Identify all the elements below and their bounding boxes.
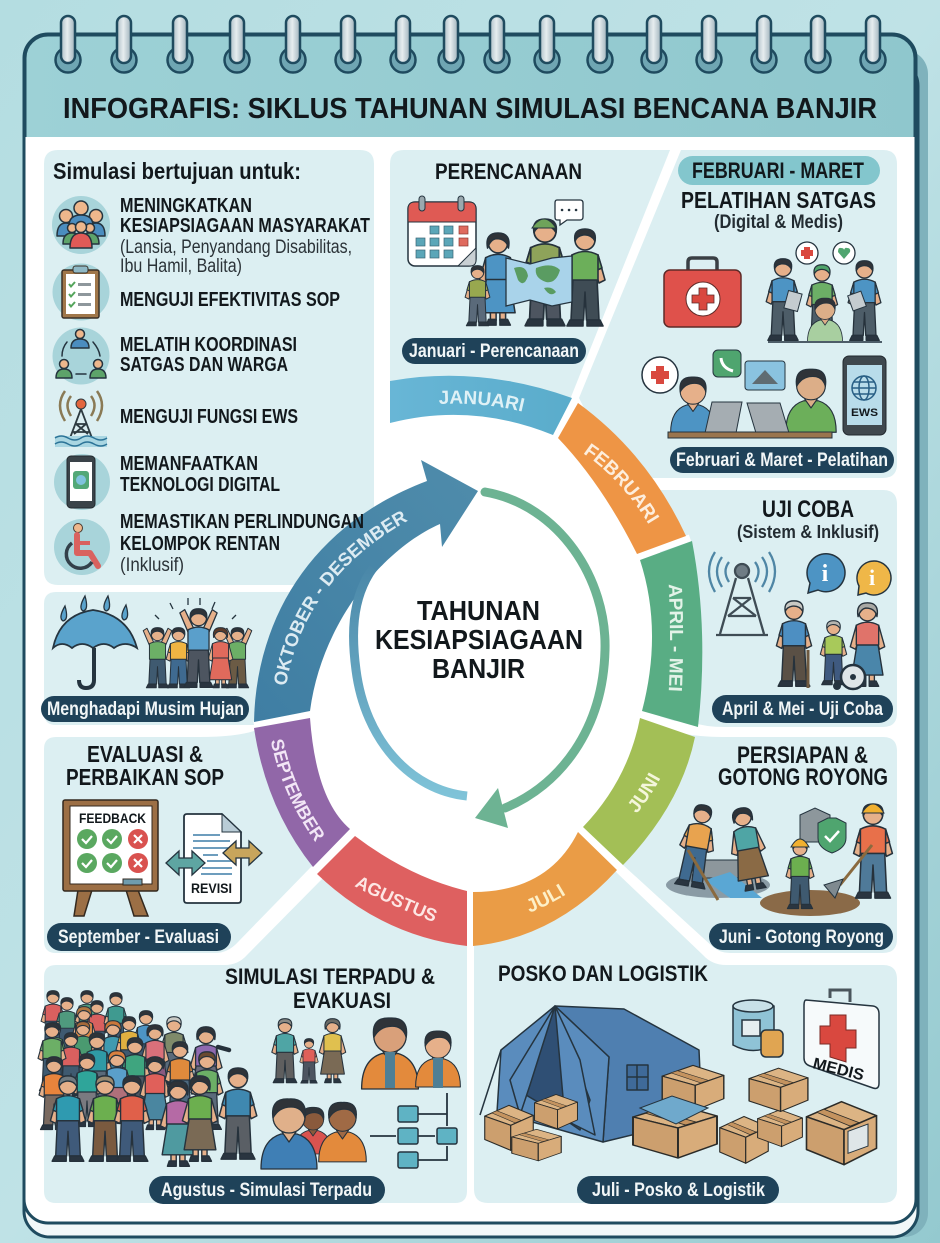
- pill: juni: Juni - Gotong Royong: [719, 927, 884, 948]
- icon: info bubbles: i: [869, 565, 875, 590]
- panel background: persiapan: [610, 733, 897, 953]
- segment: September: [254, 718, 350, 867]
- icon: info bubbles: [807, 554, 891, 595]
- pill: juli: [577, 1176, 779, 1204]
- pill: menghadapi musim hujan: [41, 696, 249, 722]
- month badge: FEBRUARI - MARET: [692, 158, 864, 183]
- pelatihan heading: [681, 187, 876, 233]
- segment: Januari: [390, 376, 572, 435]
- pill: april mei: [712, 695, 893, 723]
- icon: EWS tower: [55, 391, 107, 447]
- evaluasi heading: EVALUASI &: [87, 741, 203, 767]
- evaluasi heading: PERBAIKAN SOP: [66, 764, 224, 790]
- goal 3 text: MELATIH KOORDINASI: [120, 334, 297, 356]
- pill: menghadapi musim hujan: Menghadapi Musim Hujan: [47, 699, 244, 720]
- spiral binding rings: [56, 16, 886, 72]
- evaluasi heading: [66, 741, 224, 790]
- icon: coordination cycle: [52, 328, 110, 384]
- segment: Februari: [558, 403, 686, 554]
- segment: April - Mei: [640, 541, 702, 727]
- panel: goals: [52, 158, 370, 576]
- perencanaan heading: PERENCANAAN: [435, 159, 582, 184]
- icon: medical kit: MEDIS: [811, 1055, 866, 1085]
- tent: [480, 1006, 702, 1142]
- pill: februari maret: [670, 447, 894, 473]
- icon: SOP clipboard: [52, 264, 110, 320]
- icon: chat bubble: [555, 200, 583, 225]
- goal 3 text: [120, 334, 297, 376]
- evacuating crowd: [38, 991, 257, 1166]
- pill: september evaluasi: September - Evaluasi: [58, 927, 219, 948]
- persiapan heading: [718, 742, 888, 791]
- month labels: APRIL - MEI: [668, 584, 684, 691]
- inner cycle arrow: green: [475, 492, 605, 828]
- pill: agustus: Agustus - Simulasi Terpadu: [161, 1180, 372, 1201]
- boxes pile left: [485, 1095, 577, 1161]
- digital training: [642, 350, 836, 438]
- icon: EWS phone: [843, 356, 886, 435]
- panel: posko: [480, 961, 879, 1204]
- icon: shield and house: [800, 808, 846, 853]
- icon: radio tower: [709, 552, 775, 635]
- pill: januari: [402, 338, 586, 364]
- month labels: SEPTEMBER: [272, 740, 324, 842]
- pill: april mei: April & Mei - Uji Coba: [722, 699, 883, 720]
- goal 1 text: KESIAPSIAGAAN MASYARAKAT: [120, 215, 370, 237]
- segment: Juli: [473, 832, 617, 946]
- volunteers in orange vests: [362, 1018, 460, 1089]
- icon: feedback board: FEEDBACK: [79, 810, 146, 826]
- trainees group: [766, 259, 882, 342]
- center title: TAHUNAN: [417, 595, 540, 626]
- icon: info bubbles: i: [822, 561, 829, 587]
- icon: calendar: [408, 196, 476, 266]
- goal 5 text: MEMANFAATKAN: [120, 453, 258, 475]
- workers cleaning: [673, 802, 772, 900]
- boxes pile right: [749, 1068, 876, 1165]
- people cheering: [143, 598, 252, 688]
- uji coba heading: [737, 496, 879, 542]
- goal 3 text: SATGAS DAN WARGA: [120, 354, 288, 376]
- panel: persiapan: [666, 742, 893, 950]
- title: INFOGRAFIS: SIKLUS TAHUNAN SIMULASI BENCANA BANJIR: [63, 93, 877, 125]
- month labels: OKTOBER - DESEMBER: [274, 512, 408, 684]
- goal 1 text: [120, 195, 370, 277]
- icon: storage jars: [733, 1000, 783, 1057]
- pill: september evaluasi: [47, 923, 231, 951]
- icon: first aid kit: [664, 258, 741, 327]
- goal 4 text: MENGUJI FUNGSI EWS: [120, 406, 298, 428]
- persiapan heading: PERSIAPAN &: [737, 742, 868, 769]
- goal 2 text: MENGUJI EFEKTIVITAS SOP: [120, 289, 340, 311]
- goal 1 text: MENINGKATKAN: [120, 195, 252, 217]
- simulasi heading: EVAKUASI: [293, 988, 391, 1013]
- panel background: posko: [474, 850, 897, 1203]
- ground and water: [666, 860, 860, 916]
- pill: januari: Januari - Perencanaan: [409, 341, 579, 362]
- goal 1 text: Ibu Hamil, Balita): [120, 256, 242, 277]
- panel: perencanaan: [402, 159, 605, 364]
- panel background: perencanaan: [390, 150, 670, 415]
- icon: revised document: [166, 814, 262, 903]
- pill: agustus: [149, 1176, 385, 1204]
- arrow: Oktober - Desember: [254, 460, 478, 722]
- icon: feedback board: [63, 800, 158, 916]
- center title: KESIAPSIAGAAN: [375, 624, 583, 655]
- icon: revised document: REVISI: [191, 881, 232, 896]
- icon: EWS phone: EWS: [851, 407, 878, 419]
- community leaders: [261, 1099, 366, 1169]
- panel: pelatihan satgas: [642, 156, 894, 473]
- panel: evaluasi: [47, 741, 262, 951]
- elderly and wheelchair users: [776, 601, 885, 690]
- boxes pile center: [633, 1065, 768, 1163]
- center title: BANJIR: [432, 653, 525, 684]
- month labels: AGUSTUS: [354, 877, 437, 921]
- icon: community group: [52, 196, 110, 254]
- workers digging: [786, 804, 892, 909]
- pill: juli: Juli - Posko & Logistik: [592, 1180, 765, 1201]
- posko heading: POSKO DAN LOGISTIK: [498, 961, 708, 986]
- pelatihan heading: PELATIHAN SATGAS: [681, 187, 876, 213]
- pill: juni: [709, 923, 893, 950]
- uji coba heading: (Sistem & Inklusif): [737, 522, 879, 542]
- goal 6 text: MEMASTIKAN PERLINDUNGAN: [120, 511, 364, 533]
- goal 1 text: (Lansia, Penyandang Disabilitas,: [120, 237, 352, 258]
- center title: [375, 595, 583, 684]
- panel: musim hujan: [41, 596, 252, 722]
- month labels: JUNI: [628, 772, 660, 812]
- persiapan heading: GOTONG ROYONG: [718, 764, 888, 791]
- goal 6 text: [120, 511, 364, 576]
- flow chart: [370, 1093, 457, 1168]
- uji coba heading: UJI COBA: [762, 496, 854, 523]
- panel background: pelatihan: [579, 150, 897, 478]
- planning team with map: [465, 219, 605, 326]
- goal 5 text: [120, 453, 280, 496]
- icon: wheelchair: [54, 519, 110, 575]
- month labels: JULI: [528, 884, 566, 912]
- panel background: goals: [44, 150, 374, 585]
- segment: Juni: [583, 718, 695, 865]
- icon: medic bubbles: [796, 242, 855, 264]
- month labels: [272, 390, 684, 921]
- inner cycle arc: blue: [354, 568, 467, 796]
- panel: simulasi terpadu: [38, 964, 460, 1204]
- panel: uji coba: [709, 496, 893, 723]
- panel background: musim hujan: [44, 592, 310, 725]
- icon: umbrella: [53, 596, 137, 688]
- month labels: JANUARI: [439, 390, 524, 412]
- panel background: evaluasi: [44, 730, 330, 953]
- goal 6 text: KELOMPOK RENTAN: [120, 533, 280, 555]
- month labels: FEBRUARI: [584, 443, 660, 524]
- icon: medical kit: [804, 990, 879, 1088]
- pill: februari maret: Februari & Maret - Pelatihan: [676, 450, 888, 471]
- annual cycle ring: [254, 376, 702, 946]
- goal 6 text: (Inklusif): [120, 555, 184, 576]
- simulasi heading: [225, 964, 435, 1013]
- segment: Agustus: [317, 836, 467, 946]
- panel background: uji coba: [650, 490, 897, 727]
- family group: [272, 1019, 346, 1083]
- goals heading: Simulasi bertujuan untuk:: [53, 158, 301, 184]
- simulasi heading: SIMULASI TERPADU &: [225, 964, 435, 989]
- panel background: simulasi terpadu: [44, 862, 467, 1203]
- icon: smartphone: [54, 454, 110, 510]
- pelatihan heading: (Digital & Medis): [714, 212, 843, 233]
- goal 5 text: TEKNOLOGI DIGITAL: [120, 474, 280, 496]
